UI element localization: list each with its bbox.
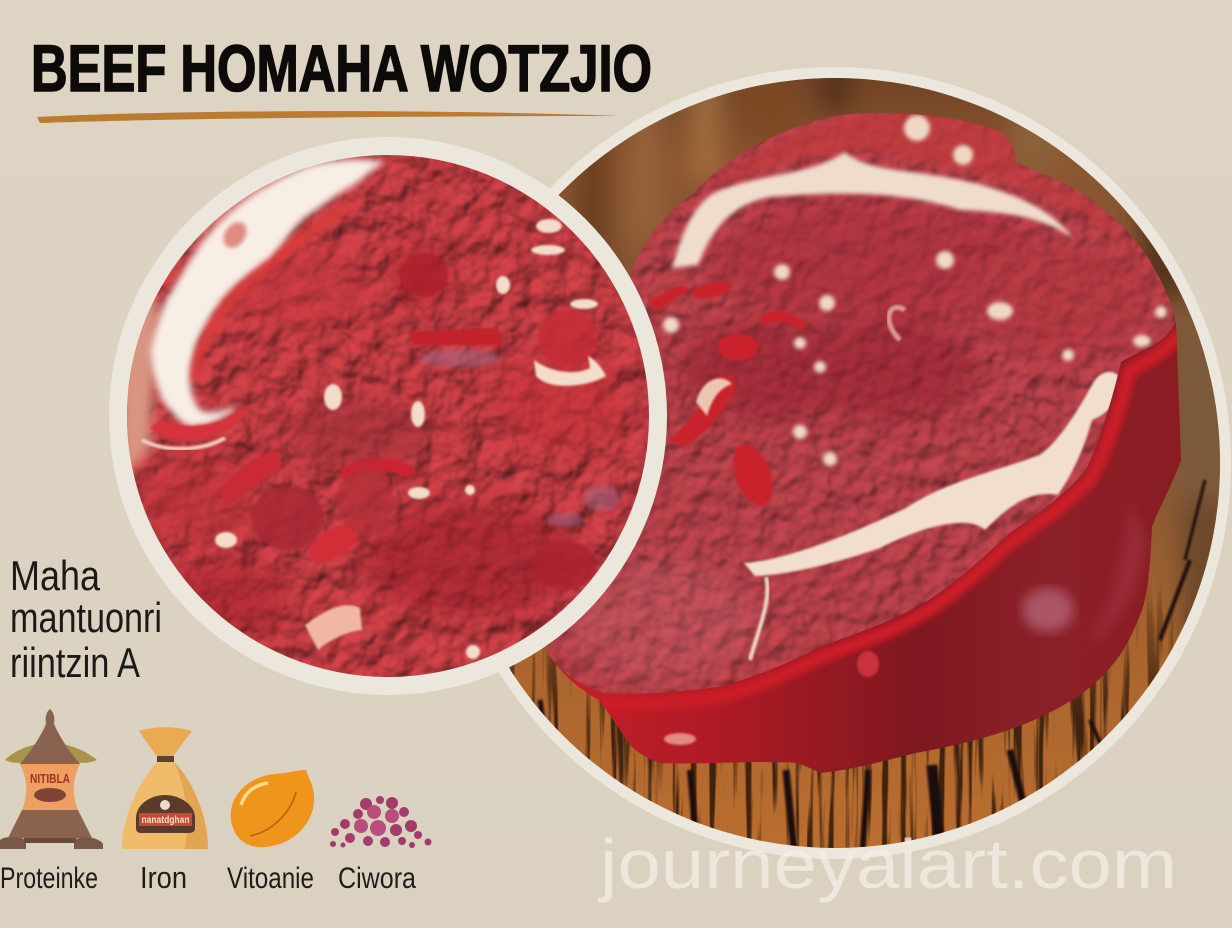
- fat band: [151, 159, 385, 426]
- side upper highlight: [1098, 518, 1145, 634]
- panel: whole steak on wood circle: [439, 60, 1232, 903]
- small red nodule: [857, 651, 879, 677]
- fat curl shadow strip: [150, 408, 249, 439]
- text block: side note: [10, 552, 162, 686]
- label: iron: Iron: [140, 860, 187, 895]
- circle frame: close-up: [109, 137, 667, 695]
- fat marbling: top: [672, 152, 1073, 268]
- fat pieces: [215, 219, 606, 659]
- soft darkening: focus blur areas: [680, 200, 1150, 420]
- red chunks: [650, 279, 808, 511]
- fat thin line: [142, 438, 225, 449]
- panel: close-up circle: [109, 137, 667, 695]
- circle frame: large: [439, 67, 1231, 859]
- fat curl: [889, 307, 905, 340]
- label: ciwora: Ciwora: [338, 862, 416, 895]
- steak top face: [540, 100, 1190, 700]
- text block: side note: Maha: [10, 552, 101, 599]
- pale lower-left wash: [565, 560, 755, 680]
- label: protein: Proteinke: [0, 862, 98, 895]
- text block: side note: mantuonri: [10, 594, 162, 641]
- label: vitamin: Vitoanie: [227, 862, 314, 895]
- wooden board: [508, 78, 1220, 848]
- icon: protein lantern: NITIBLA: [30, 771, 70, 786]
- text block: side note: riintzin A: [10, 639, 140, 686]
- title: BEEF HOMAHA WOTZJIO: [31, 31, 652, 105]
- icon: protein lantern: [0, 709, 103, 849]
- mauve sheens: [420, 349, 620, 527]
- fat marbling: lower: [744, 372, 1122, 576]
- icon: vitamin fruit: [231, 770, 314, 847]
- red chunks: [220, 253, 598, 589]
- steak: [540, 100, 1190, 780]
- icon: iron sack: nanatdghan: [142, 815, 190, 826]
- fat flecks: [663, 115, 1167, 466]
- icon: berry pile: [330, 796, 432, 848]
- watermark: journeyaiart.com: [598, 825, 1177, 903]
- pink spot in fat: [221, 220, 249, 250]
- bright rim band: [600, 332, 1180, 704]
- fat rim red: [195, 205, 350, 380]
- wood grain: [510, 586, 1188, 848]
- fat branch: [750, 577, 767, 660]
- pale left edge: [120, 300, 160, 480]
- pale top-left wash: [178, 185, 267, 262]
- title underline: [37, 111, 620, 123]
- bright and dark areas: [140, 250, 625, 640]
- minced meat base: [120, 150, 660, 690]
- side highlight pale patch: [664, 733, 696, 745]
- fat on chunk: [696, 378, 732, 416]
- steak side: [540, 100, 1190, 780]
- side sheen: [1022, 588, 1074, 632]
- outer band above fat: [712, 113, 1134, 257]
- icon: iron sack: [122, 727, 208, 849]
